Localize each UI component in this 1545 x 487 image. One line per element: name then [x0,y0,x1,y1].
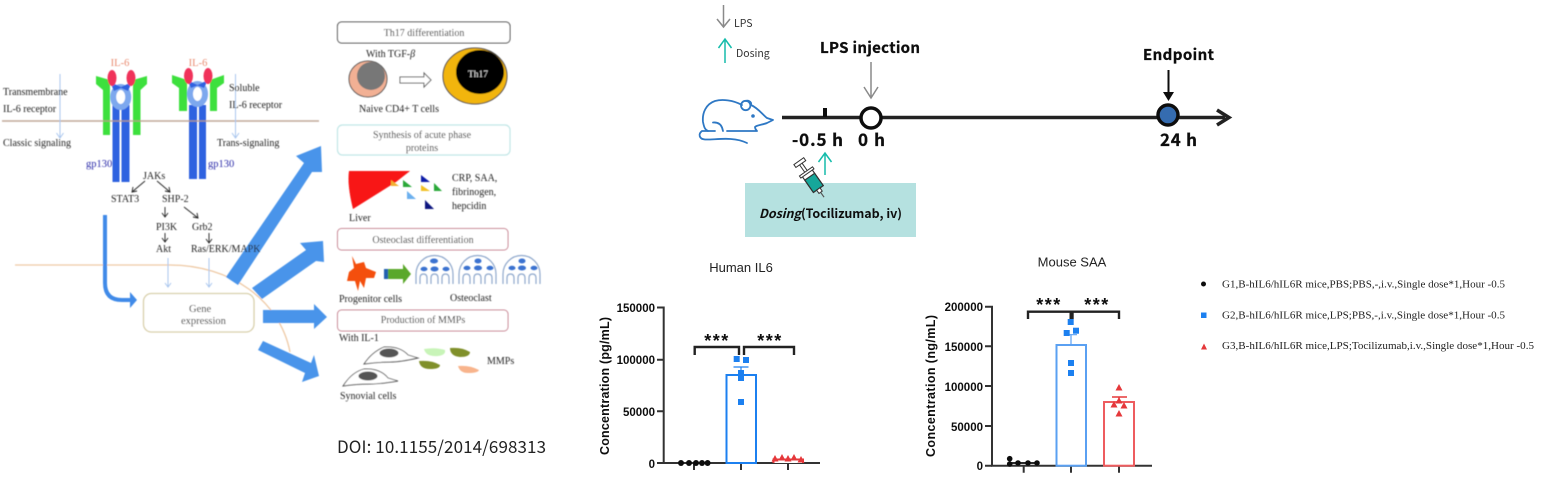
box: synthesis of acute phase proteins [338,125,510,155]
icon: MMP blobs [419,348,479,373]
box: synthesis of acute phase proteins: Synthesis of acute phase [373,130,472,141]
label: acute phase proteins [349,173,497,224]
icon: syringe [792,157,831,202]
box: dosing [745,183,916,237]
y tick labels: 50000 [951,422,983,434]
label: with IL-1: With IL-1 [339,333,379,344]
box: Th17 differentiation: Th17 differentiation [384,28,464,39]
icon: synovial cells [343,347,418,386]
pathway labels: Ras/ERK/MAPK [191,244,261,255]
data points: G3 [1110,384,1128,416]
labels: progenitor and osteoclast: Progenitor cells [339,294,402,305]
nuclear envelope [15,265,290,352]
label: Endpoint with arrow [1143,44,1215,101]
panel: experimental timeline [700,5,1229,237]
pathway labels: Trans-signaling [217,138,279,149]
icon: Th17 cell [443,48,507,104]
label: acute phase proteins: hepcidin [452,201,486,212]
y tick labels: 0 [649,459,655,471]
significance brackets [695,331,794,355]
label: 0 h: 0 h [858,126,885,151]
axes and ticks [985,307,1152,473]
axes and ticks [657,308,820,470]
pathway labels: IL-6 receptor [3,104,57,115]
labels: progenitor and osteoclast [339,293,492,305]
y tick labels: 200000 [945,302,983,314]
data points: G1 [678,460,711,466]
box: dosing: Dosing(Tocilizumab, iv) [759,203,902,222]
pathway labels [3,83,283,255]
data points: G2 [1064,319,1079,376]
arrow: green differentiation [384,264,411,284]
legend: dosing arrow [718,39,770,63]
legend: treatment groups [1201,278,1534,352]
labels: MMPs and synovial cells: Synovial cells [340,391,396,402]
marker: 24 h [1158,105,1178,125]
data points: G3 [772,454,804,462]
bent arrow into gene expression [105,215,137,308]
IL-6 labels: IL-6 [111,58,129,69]
icon: osteoclasts [416,256,540,284]
label: acute phase proteins: CRP, SAA, [452,173,497,184]
bar: G2 [1056,335,1086,466]
pathway labels: gp130 [86,159,112,170]
legend item: G3: G3,B-hIL6/hIL6R mice,LPS;Tocilizumab,i.v.,Single dose*1,Hour -0.5 [1222,340,1534,352]
icon: mouse [700,100,773,143]
y tick labels [945,302,983,473]
marker: 0 h [861,108,881,128]
box: osteoclast differentiation [338,228,508,250]
significance brackets: *** [704,331,730,351]
y tick labels: 50000 [623,407,655,419]
icon: Th17 cell: Th17 [468,70,488,80]
small cascade arrows [132,181,212,243]
y tick labels: 150000 [617,303,655,315]
icon: naive T cell [349,61,387,97]
y tick labels [617,303,655,471]
pathway labels: Classic signaling [3,138,71,149]
receptor: transmembrane IL-6 receptor complex [96,70,147,182]
significance brackets: *** [757,331,783,351]
icon: liver with proteins [348,171,442,209]
y axis label: Concentration (pg/mL) [598,317,612,455]
bar: G2 [726,367,756,463]
panel: IL-6 downstream effects [338,22,540,402]
output arrows [226,146,327,382]
pathway labels: Transmembrane [3,87,68,98]
label: with TGF-beta: With TGF-β [366,49,415,60]
chart title: Human IL6 [709,260,773,275]
timeline axis [782,108,1229,125]
data points: G1 [1007,456,1040,467]
thin signaling arrows [56,74,239,287]
y tick labels: 100000 [945,382,983,394]
box: osteoclast differentiation: Osteoclast differentiation [372,235,474,246]
chart: Human IL6 [598,260,820,471]
IL-6 labels [111,58,207,69]
labels: MMPs and synovial cells [340,356,514,402]
panel: IL-6 signaling pathway [2,58,327,382]
pathway labels: Soluble [229,83,260,94]
label: acute phase proteins: fibrinogen, [452,187,496,198]
label: -0.5 h: -0.5 h [792,126,843,151]
label: acute phase proteins: Liver [349,213,371,224]
box: production of MMPs [338,310,508,331]
pathway labels: SHP-2 [162,194,189,205]
y tick labels: 150000 [945,342,983,354]
box: gene expression: expression [181,316,227,327]
pathway labels: Grb2 [192,222,213,233]
label: LPS injection with arrow [820,37,920,98]
chart title: Mouse SAA [1038,254,1107,270]
y axis label: Concentration (ng/mL) [924,315,938,457]
pathway labels: gp130 [208,159,234,170]
box: Th17 differentiation [338,22,510,43]
pathway labels: JAKs [143,171,165,182]
icon: progenitor cell [347,256,376,291]
labels: progenitor and osteoclast: Osteoclast [450,293,492,304]
arrow: dosing [818,153,832,175]
legend item: G2: G2,B-hIL6/hIL6R mice,LPS;PBS,-,i.v.,Single dose*1,Hour -0.5 [1222,310,1505,322]
legend: dosing arrow: Dosing [736,46,770,61]
data points: G2 [734,356,749,405]
pathway labels: STAT3 [111,194,139,205]
legend: LPS arrow: LPS [734,16,752,31]
significance brackets [1028,295,1119,319]
membrane line [2,120,319,122]
significance brackets: *** [1084,295,1110,315]
label: Endpoint with arrow: Endpoint [1143,44,1215,65]
legend: LPS arrow [717,5,752,31]
y tick labels: 100000 [617,355,655,367]
box: synthesis of acute phase proteins: proteins [406,143,438,154]
chart: Mouse SAA [924,254,1152,473]
citation DOI: DOI: 10.1155/2014/698313 [337,433,546,458]
significance brackets: *** [1036,295,1062,315]
label: LPS injection with arrow: LPS injection [820,37,920,58]
label: naive T cells: Naive CD4+ T cells [359,104,439,115]
hollow arrow [400,73,431,87]
bar: G3 [774,460,803,463]
pathway labels: PI3K [156,222,178,233]
box: gene expression [144,294,254,332]
IL-6 labels: IL-6 [189,58,207,69]
pathway labels: Akt [156,244,171,255]
box: production of MMPs: Production of MMPs [381,315,465,326]
legend item: G1: G1,B-hIL6/hIL6R mice,PBS;PBS,-,i.v.,Single dose*1,Hour -0.5 [1222,278,1505,290]
receptor: soluble IL-6 receptor complex [172,68,224,179]
labels: MMPs and synovial cells: MMPs [487,356,514,367]
bar: G3 [1104,397,1134,466]
y tick labels: 0 [977,461,983,473]
pathway labels: IL-6 receptor [229,100,283,111]
label: 24 h: 24 h [1160,126,1197,151]
box: gene expression: Gene [189,304,211,315]
